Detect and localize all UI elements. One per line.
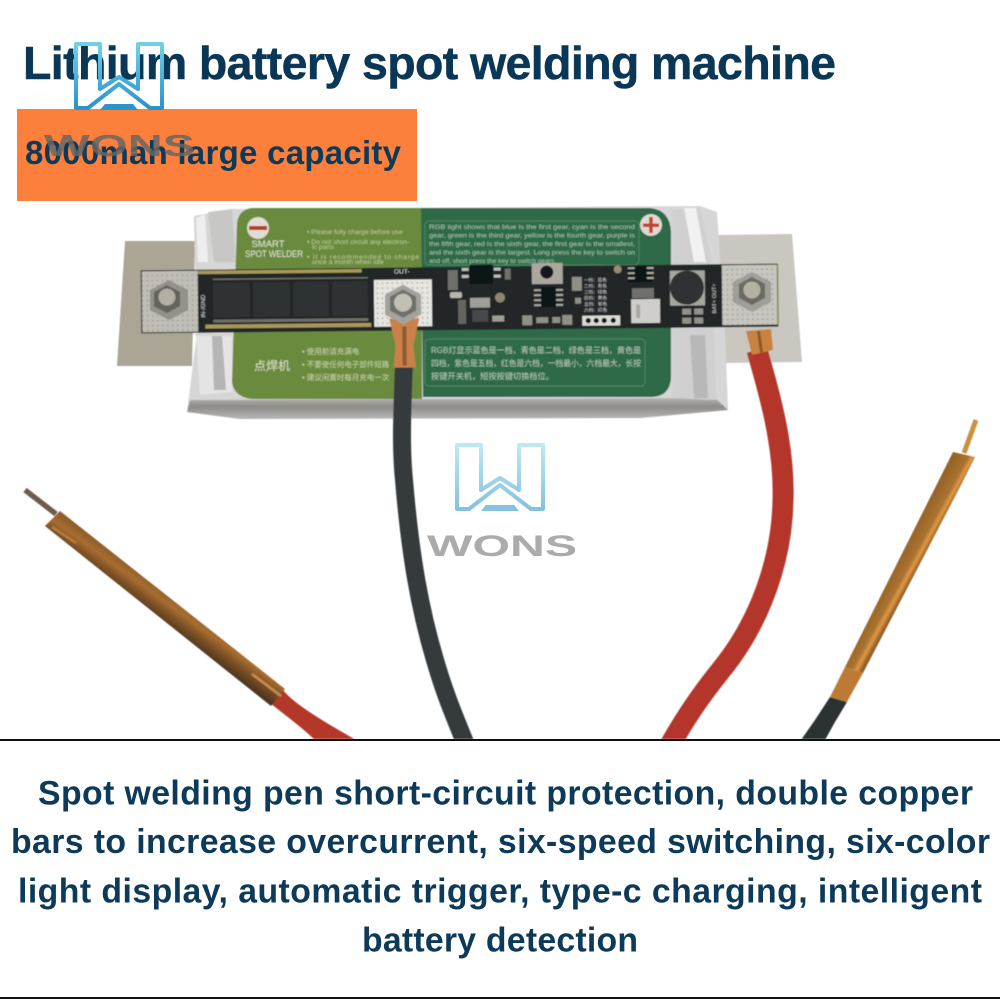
pen wire red (270, 690, 356, 740)
right nickel pad (722, 265, 779, 325)
passive row (522, 277, 582, 325)
logo mark (76, 44, 162, 110)
USB type-c port (631, 288, 660, 323)
english instructions box: and off, short press the key to switch gears. (429, 258, 556, 265)
gear colour table: 一档：蓝色 (584, 276, 607, 284)
feature description text: Spot welding pen short-circuit protection, double copper (38, 774, 973, 812)
gear colour table (584, 276, 608, 314)
gear colour table: 四档：黄色 (584, 294, 607, 302)
pen copper barrel (845, 452, 975, 673)
bottom rule (0, 997, 1000, 999)
feature description text: battery detection (362, 922, 638, 960)
logo mark (457, 445, 543, 511)
orange capacity banner (17, 109, 417, 201)
MOSFET pins (213, 277, 368, 323)
english instructions box: the fifth gear, red is the sixth gear, the first gear is the smallest, (429, 241, 635, 248)
board substrate (141, 264, 778, 333)
battery nickel tab left (117, 241, 195, 366)
label bullet notes english: ▪ Please fully charge before use (307, 229, 403, 236)
board silk text: IN-/GND: IN-/GND (201, 294, 207, 318)
icon: minus sign (247, 217, 269, 239)
switch IC and passives (448, 264, 511, 324)
inductor (670, 270, 705, 306)
banner text: 8000mah large capacity (25, 134, 402, 171)
label bullet notes chinese: ▪ 建议闲置时每月充电一次 (302, 372, 390, 382)
label bullet notes english: ▪ It is recommended to charge (307, 254, 419, 261)
label bullet notes english: ▪ Do not short circuit any electron- (307, 239, 409, 246)
SOP8 chip (534, 287, 563, 307)
pen tip (964, 420, 976, 453)
gear colour table: 二档：青色 (584, 282, 607, 290)
gear colour table: 三档：绿色 (584, 288, 607, 296)
pen copper barrel (45, 511, 285, 706)
battery cell body (187, 206, 728, 419)
label bullet notes english: ic parts (312, 244, 335, 251)
chinese instructions box: 四档，紫色是五档，红色是六档，一档最小，六档最大，长按 (431, 358, 641, 368)
product photo: spot welder on battery with cables and pens (25, 206, 976, 745)
icon: plus sign (640, 214, 662, 236)
small ICs right side (614, 265, 654, 282)
label heading chinese: 点焊机 (254, 358, 290, 373)
black cable (402, 360, 466, 745)
left bolt (150, 280, 188, 320)
right bolt (733, 272, 771, 312)
label bullet notes chinese: ▪ 使用前请充满电 (302, 346, 360, 356)
pen wire black (801, 697, 847, 740)
label bullet notes chinese: ▪ 不要使任何电子部件短路 (302, 359, 390, 369)
silk text: BAT+ OUT+: BAT+ OUT+ (712, 283, 718, 313)
battery label: olive panel (232, 208, 422, 399)
battery label: green panel (421, 208, 671, 397)
watermark logo center (427, 445, 577, 563)
label heading: smart spot welder: SPOT WELDER (245, 249, 303, 260)
MOSFET row (213, 281, 368, 318)
english instructions box: gear, green is the third gear, yellow is the fourth gear, purple is (429, 232, 636, 240)
title: Lithium battery spot welding machine (23, 37, 836, 89)
board silk text: OUT-: OUT- (394, 269, 410, 276)
red cable (670, 350, 783, 745)
right welding pen (801, 420, 976, 740)
chinese instructions box (425, 339, 645, 386)
center nickel pad (374, 279, 432, 327)
feature description text: light display, automatic trigger, type-c charging, intelligent (18, 872, 982, 910)
battery nickel tab right (718, 234, 802, 363)
pen tip (25, 490, 56, 514)
MOS pair near inductor (682, 308, 703, 324)
PCB spot welder board (141, 261, 779, 370)
label bullet notes english (307, 229, 419, 266)
red wire copper lug (746, 329, 773, 355)
feature description text (11, 774, 990, 960)
logo wordmark: WONS (44, 128, 195, 163)
pen collar detail (252, 674, 281, 696)
gear colour table: 六档：红色 (584, 306, 608, 314)
pen collar (830, 667, 863, 702)
center bolt and lug (385, 284, 422, 368)
gear colour table: 五档：紫色 (584, 300, 607, 308)
chinese instructions box: RGB灯显示蓝色是一档，青色是二档，绿色是三档，黄色是 (431, 345, 641, 355)
logo wordmark: WONS (427, 530, 577, 563)
top divider rule (0, 739, 1000, 741)
english instructions box (425, 221, 639, 265)
label heading: smart spot welder: SMART (251, 239, 285, 250)
header pads (582, 315, 620, 326)
feature description text: bars to increase overcurrent, six-speed switching, six-color (11, 823, 990, 861)
label bullet notes english: once a month when idle (312, 259, 384, 266)
left welding pen (25, 490, 356, 740)
english instructions box: and the sixth gear is the largest. Long press the key to switch on (429, 250, 635, 256)
left nickel pad (142, 271, 198, 332)
chinese instructions box: 按键开关机，短按按键切换档位。 (431, 371, 554, 381)
watermark logo top (44, 44, 195, 163)
copper bars (198, 269, 371, 329)
push button (532, 263, 563, 284)
label heading: smart spot welder (245, 239, 303, 260)
english instructions box: RGB light shows that blue is the first gear, cyan is the second (429, 224, 635, 231)
label bullet notes chinese (302, 346, 390, 382)
